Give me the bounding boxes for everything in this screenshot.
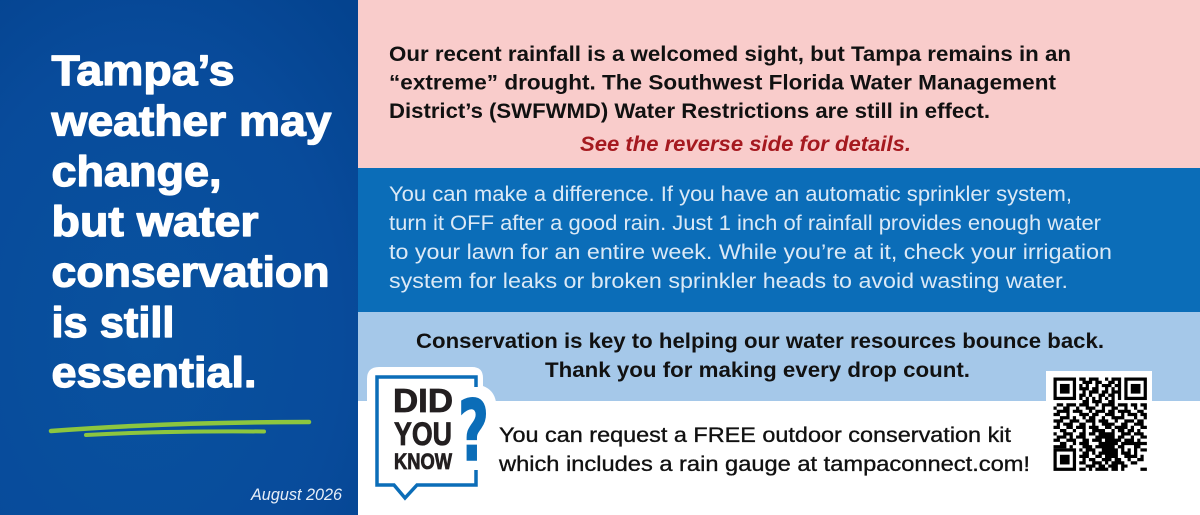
text: sprinkler advice: system for leaks or broken sprinkler heads to avoid wasting water.: [389, 270, 1068, 293]
panel: headline: [0, 0, 358, 515]
text: drought statement: District’s (SWFWMD) Water Restrictions are still in effect.: [389, 100, 990, 123]
text: sprinkler advice: [389, 183, 1112, 293]
icon: did you know bubble: ?: [458, 382, 489, 480]
text: kit offer: [498, 424, 1030, 476]
panel: drought notice: [358, 0, 1200, 168]
heading: main message: essential.: [52, 349, 256, 397]
icon: did you know bubble: YOU: [394, 416, 452, 452]
heading: main message: weather may: [50, 98, 332, 146]
panel: free kit: [358, 401, 1200, 515]
heading: main message: but water: [52, 198, 259, 246]
heading: main message: is still: [52, 299, 174, 347]
panel: thank you: [358, 312, 1200, 401]
heading: main message: conservation: [52, 248, 330, 296]
heading: main message: change,: [52, 148, 222, 196]
underline: green brush strokes: [51, 422, 309, 435]
text: reverse side note: See the reverse side for details.: [580, 133, 911, 156]
text: sprinkler advice: You can make a difference. If you have an automatic sprinkler system,: [389, 183, 1072, 206]
date: August 2026: [250, 485, 343, 504]
text: conservation thanks: Conservation is key to helping our water resources bounce back.: [416, 330, 1104, 353]
heading: main message: [50, 47, 332, 397]
text: conservation thanks: [416, 330, 1104, 382]
icon: QR code: [1046, 371, 1152, 477]
icon: did you know bubble: DID: [393, 382, 453, 419]
text: conservation thanks: Thank you for making every drop count.: [545, 359, 970, 382]
icon: did you know bubble: KNOW: [394, 449, 452, 474]
text: drought statement: “extreme” drought. The Southwest Florida Water Management: [389, 72, 1056, 94]
text: sprinkler advice: to your lawn for an entire week. While you’re at it, check your irrigation: [389, 241, 1112, 264]
text: sprinkler advice: turn it OFF after a good rain. Just 1 inch of rainfall provides enough water: [389, 212, 1101, 235]
text: drought statement: Our recent rainfall is a welcomed sight, but Tampa remains in an: [389, 43, 1071, 66]
text: drought statement: [389, 43, 1071, 123]
icon: did you know bubble: [367, 367, 496, 515]
text: kit offer: You can request a FREE outdoor conservation kit: [499, 424, 1011, 447]
panel: what you can do: [358, 168, 1200, 312]
text: kit offer: which includes a rain gauge at tampaconnect.com!: [498, 453, 1030, 476]
heading: main message: Tampa’s: [52, 47, 234, 95]
